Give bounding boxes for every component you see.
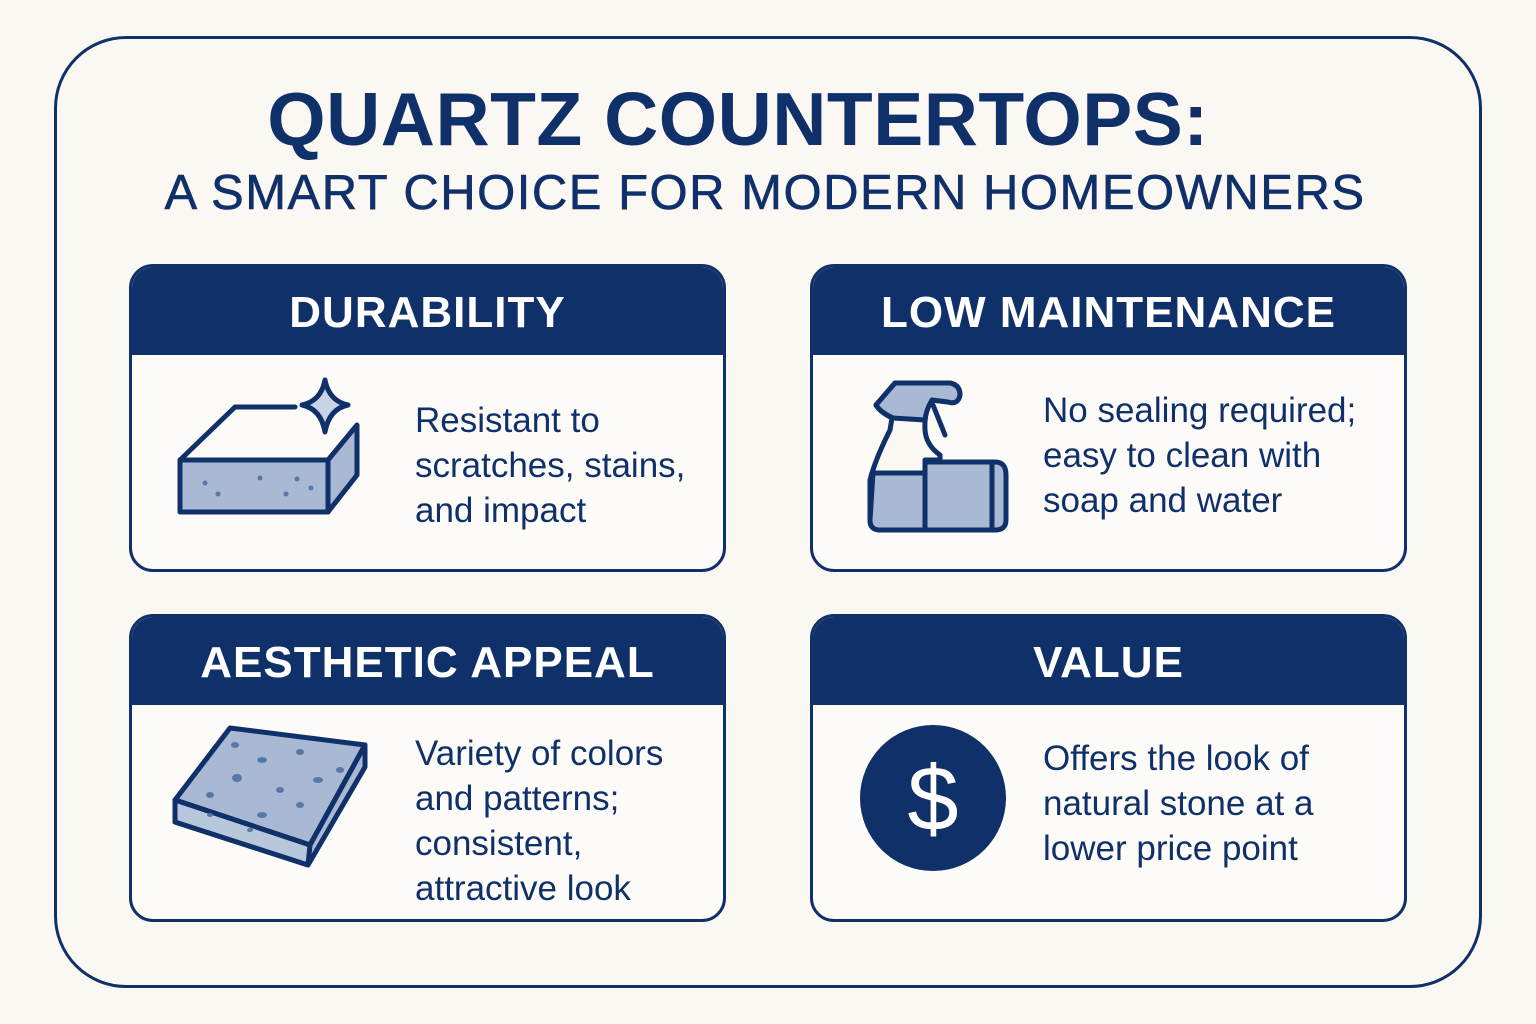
text: aesthetic appeal [415,734,663,908]
text: low maintenance: No sealing required; [1043,391,1356,430]
panel: value [810,614,1407,922]
text: durability [415,401,685,530]
text: aesthetic appeal: attractive look [415,869,631,908]
text: value [1043,739,1314,868]
heading: aesthetic appeal: AESTHETIC APPEAL [200,638,655,687]
text: value: Offers the look of [1043,739,1309,778]
title: QUARTZ COUNTERTOPS: [267,77,1209,161]
text: value: lower price point [1043,829,1298,868]
panel: aesthetic appeal [129,614,726,922]
icon: spray bottle and cloth [870,383,1006,530]
panel: durability [129,264,726,572]
icon: quartz slab [175,728,365,865]
subtitle: A SMART CHOICE FOR MODERN HOMEOWNERS [164,166,1366,220]
icon: dollar coin: $ [907,748,959,850]
text: low maintenance: soap and water [1043,481,1282,520]
text: low maintenance [1043,391,1356,520]
text: durability: Resistant to [415,401,600,440]
heading: durability: DURABILITY [289,288,566,337]
icon: quartz block with sparkle [180,380,357,512]
text: aesthetic appeal: Variety of colors [415,734,663,773]
heading: low maintenance [813,267,1404,355]
text: aesthetic appeal: consistent, [415,824,582,863]
text: durability: and impact [415,491,586,530]
heading: aesthetic appeal [132,617,723,705]
text: aesthetic appeal: and patterns; [415,779,619,818]
text: low maintenance: easy to clean with [1043,436,1321,475]
heading: low maintenance: LOW MAINTENANCE [881,288,1336,337]
text: durability: scratches, stains, [415,446,685,485]
text: value: natural stone at a [1043,784,1313,823]
heading: value: VALUE [1033,638,1184,687]
heading: value [813,617,1404,705]
icon: dollar coin [860,725,1006,871]
heading: durability [132,267,723,355]
panel: low maintenance [810,264,1407,572]
